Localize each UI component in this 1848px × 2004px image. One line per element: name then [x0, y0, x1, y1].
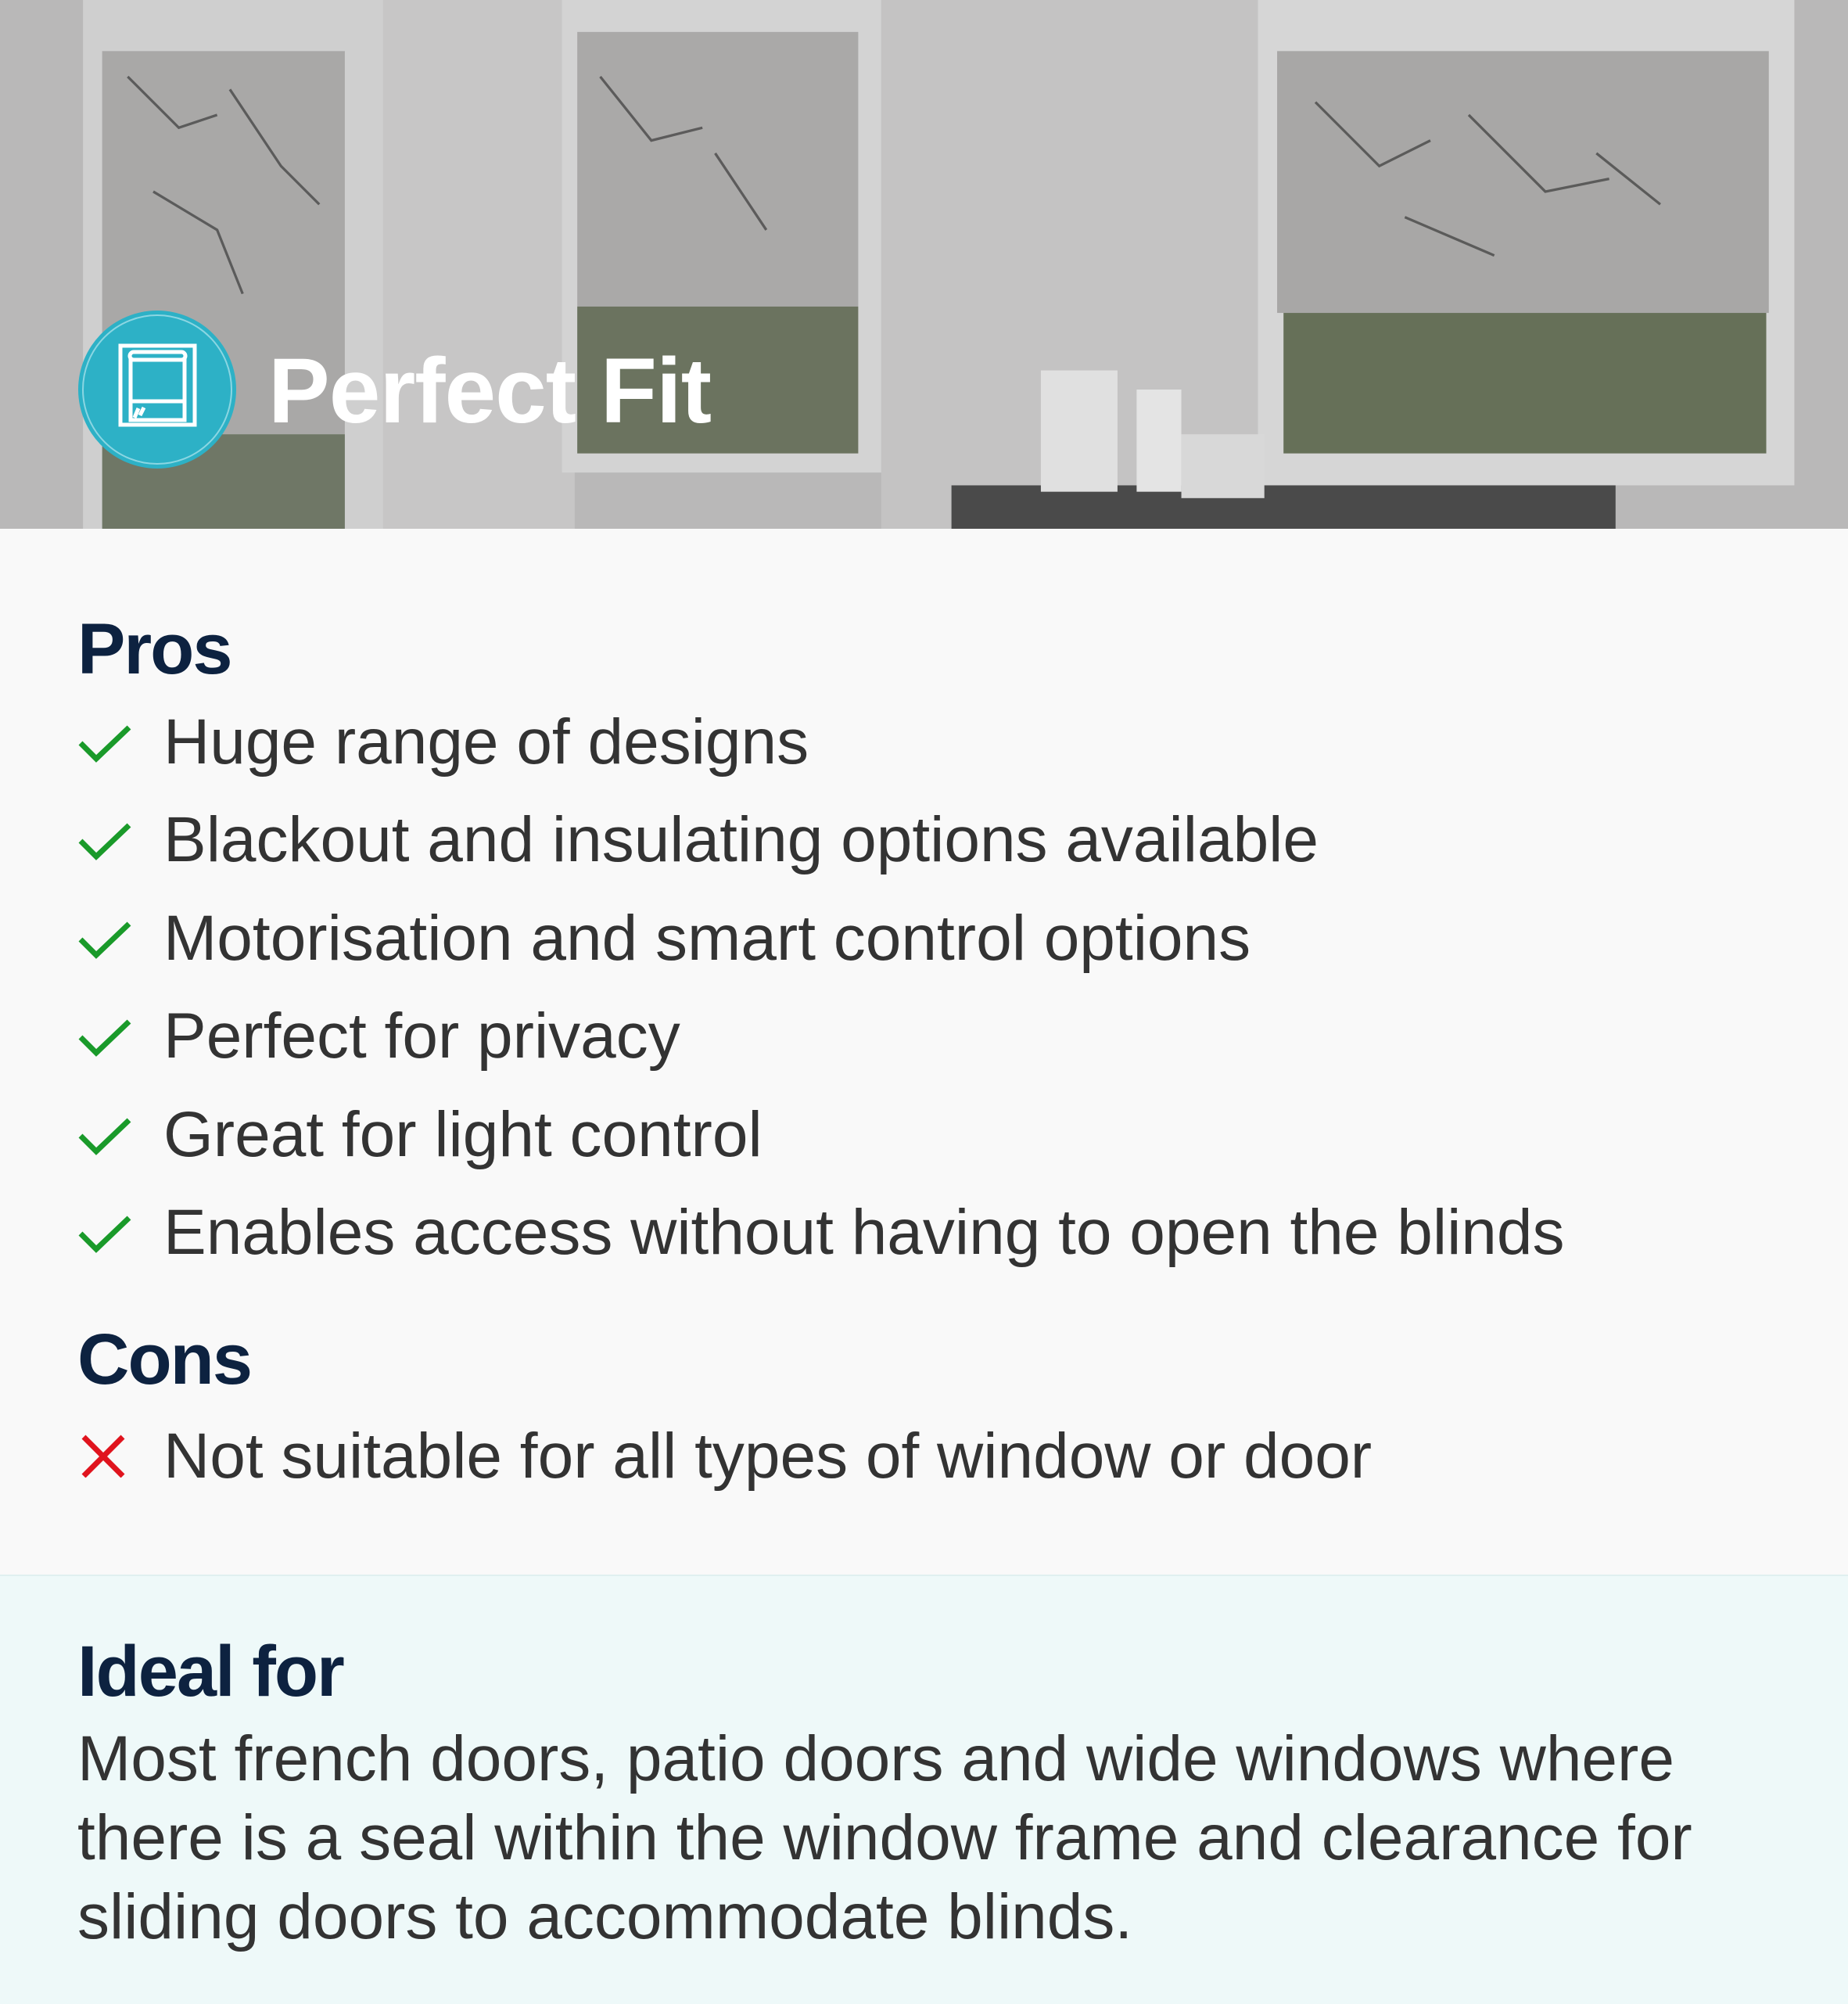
cons item: Not suitable for all types of window or door	[163, 1420, 1372, 1492]
panel: ideal for	[0, 1575, 1848, 2004]
ideal for text: Most french doors, patio doors and wide windows where there is a seal within the window frame and clearance for sliding doors to accommodate blinds.	[77, 1723, 1692, 1952]
heading: Cons: Cons	[77, 1320, 251, 1399]
panel: pros	[77, 609, 1565, 1399]
heading: Ideal for: Ideal for	[77, 1632, 343, 1711]
pros item: Perfect for privacy	[163, 1000, 680, 1072]
header photo	[0, 0, 1848, 529]
pros item: Blackout and insulating options available	[163, 804, 1319, 875]
heading: Pros: Pros	[77, 609, 231, 689]
pros item: Huge range of designs	[163, 706, 809, 778]
title: Perfect Fit	[268, 339, 711, 443]
pros item: Motorisation and smart control options	[163, 903, 1251, 974]
icon: perfect fit blind	[78, 311, 236, 469]
pros item: Enables access without having to open the blinds	[163, 1197, 1565, 1268]
pros item: Great for light control	[163, 1099, 763, 1170]
